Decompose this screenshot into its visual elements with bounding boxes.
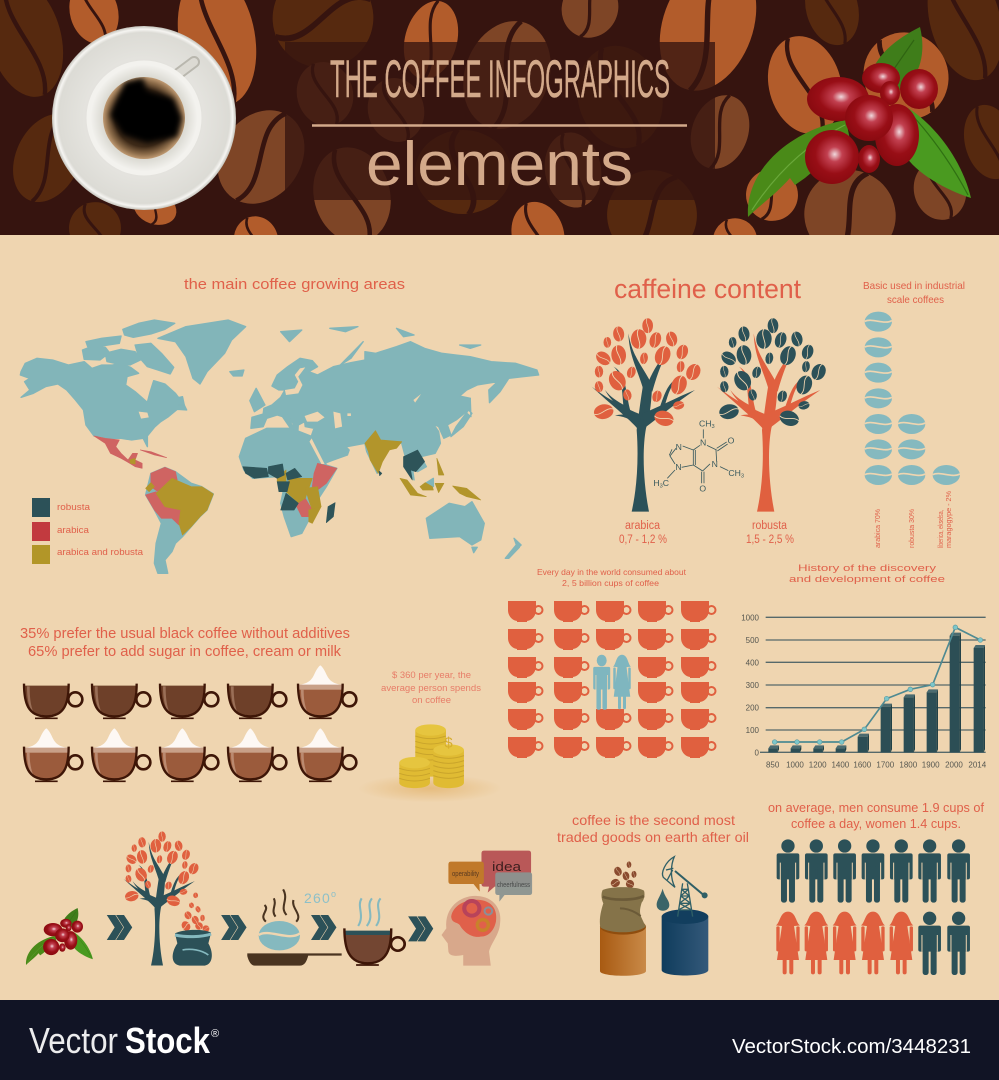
bars [768, 633, 985, 752]
bean chart labels [875, 491, 953, 548]
subtitle text: elements [366, 130, 633, 199]
y axis labels: 500 [746, 636, 760, 645]
industrial coffees heading [863, 280, 965, 306]
footer bar [0, 1000, 999, 1080]
process step: tree [123, 831, 200, 965]
caffeine molecule: O [728, 435, 735, 445]
preference text: 65% prefer to add sugar in coffee, cream or milk [28, 644, 342, 660]
caffeine molecule: O [699, 484, 706, 494]
spending text: on coffee [412, 695, 451, 705]
x axis labels: 1000 [786, 761, 804, 770]
y axis labels: 400 [746, 658, 760, 667]
bubble text: idea: idea [492, 859, 522, 874]
world consumption text: Every day in the world consumed about [537, 567, 687, 577]
y axis labels: 200 [746, 704, 760, 713]
x axis labels: 1800 [899, 761, 918, 770]
caffeine trees and molecule [592, 318, 829, 512]
x axis labels: 1900 [922, 761, 940, 770]
caffeine molecule [653, 418, 744, 494]
arabica label: 0,7 - 1,2 % [619, 534, 667, 546]
industrial coffees heading: scale coffees [887, 294, 944, 306]
header coffee bean pattern [0, 0, 999, 278]
process arrow 2 [221, 915, 247, 940]
men and women pictogram [776, 839, 970, 975]
history chart title: and development of coffee [789, 574, 945, 584]
title panel [285, 42, 715, 200]
bean chart labels: maragogype - 2% [946, 491, 953, 548]
caffeine molecule: N [700, 438, 706, 448]
robusta label [746, 520, 794, 546]
traded goods text [557, 812, 749, 845]
caffeine molecule: CH [699, 418, 712, 428]
oil derrick pump [663, 857, 708, 917]
legend: arabica and robusta: arabica and robusta [57, 547, 144, 558]
caffeine molecule: CH [728, 468, 741, 478]
caffeine molecule: N [675, 462, 682, 472]
spending text: $ 360 per year, the [392, 670, 471, 680]
industrial coffees bean chart [865, 312, 960, 485]
speech bubble: cheerfulness [495, 872, 532, 902]
consumption by gender text: on average, men consume 1.9 cups of [768, 800, 984, 815]
robusta label: 1,5 - 2,5 % [746, 534, 794, 546]
oil drop [657, 889, 669, 911]
history bar and line chart [741, 613, 987, 770]
coffee process flow [107, 831, 532, 966]
bean chart labels: arabica 70% [875, 509, 882, 548]
y axis labels: 100 [746, 726, 760, 735]
preference text [20, 626, 350, 660]
speech bubble: idea [481, 851, 531, 893]
coffee berries icon [748, 27, 971, 217]
consumption by gender text: coffee a day, women 1.4 cups. [791, 816, 961, 831]
oil barrel [662, 909, 708, 975]
spending text [381, 670, 482, 705]
x axis labels: 850 [766, 761, 780, 770]
caffeine molecule: C [663, 478, 669, 488]
process step: roasting pan [247, 889, 342, 966]
header banner [0, 0, 999, 235]
speech bubble: operability [448, 862, 484, 892]
world consumption text: 2, 5 billion cups of coffee [562, 578, 659, 588]
caffeine molecule: 3 [660, 484, 663, 490]
legend: robusta: robusta [57, 502, 91, 513]
x axis labels: 1600 [853, 761, 872, 770]
process step: head with ideas [442, 851, 532, 966]
traded goods text: traded goods on earth after oil [557, 829, 749, 845]
bubble text: cheerfulness: cheerfulness [497, 880, 530, 889]
process step: sack of beans [173, 893, 212, 966]
trend line [772, 625, 983, 744]
caffeine heading: caffeine content [614, 274, 801, 304]
x axis labels: 1700 [876, 761, 895, 770]
map heading: the main coffee growing areas [184, 276, 405, 293]
gold coins icon: $ [445, 735, 453, 751]
footer logo: Vector [29, 1020, 118, 1061]
y axis grid [760, 617, 986, 752]
spending text: average person spends [381, 683, 482, 693]
robusta label: robusta [752, 520, 788, 532]
y axis labels: 300 [746, 681, 760, 690]
caffeine molecule: N [712, 459, 718, 469]
process step: coffee cup [344, 898, 405, 965]
map legend [32, 498, 144, 564]
coffee cup icon [52, 26, 236, 210]
roasting temperature: 260 [304, 890, 330, 906]
cups grid [508, 601, 716, 758]
bean chart labels: liberica, ekselsa, [938, 510, 945, 548]
roasting temperature: o [331, 889, 336, 899]
footer logo: Stock [125, 1020, 211, 1061]
caffeine molecule: 3 [741, 474, 744, 480]
coffee and oil barrels [600, 857, 708, 976]
black and cream coffee cups [24, 665, 356, 781]
y axis labels: 1000 [741, 613, 760, 622]
arabica tree [592, 318, 703, 512]
women row [776, 912, 913, 974]
coffee barrel [600, 861, 646, 976]
world map [20, 320, 539, 573]
process arrow 1 [107, 915, 132, 940]
y axis labels: 0 [755, 748, 760, 757]
traded goods text: coffee is the second most [572, 812, 735, 828]
x axis labels: 1400 [831, 761, 850, 770]
legend: arabica: arabica [57, 525, 90, 536]
gold coins icon [358, 724, 502, 802]
footer logo: ® [211, 1028, 219, 1040]
couple icons [593, 655, 631, 710]
preference text: 35% prefer the usual black coffee without additives [20, 626, 350, 642]
robusta tree [717, 318, 829, 512]
bean chart labels: robusta 30% [909, 509, 916, 548]
footer logo [29, 1020, 219, 1061]
x axis labels: 1200 [809, 761, 827, 770]
caffeine molecule: N [676, 442, 682, 452]
process arrow 4 [408, 916, 433, 941]
world consumption text [537, 567, 687, 588]
x axis labels: 2000 [945, 761, 963, 770]
x axis labels [766, 761, 987, 770]
process arrow 3 [311, 915, 336, 940]
history chart title [789, 563, 945, 584]
process step: berries [26, 908, 93, 965]
caffeine molecule: H [653, 478, 660, 488]
y axis labels [741, 613, 760, 757]
arabica label: arabica [625, 520, 661, 532]
arabica label [619, 520, 667, 546]
men row [777, 839, 970, 903]
x axis labels: 2014 [968, 761, 987, 770]
men in second row [918, 912, 970, 975]
bubble text: operability: operability [452, 869, 479, 878]
history chart title: History of the discovery [798, 563, 937, 573]
industrial coffees heading: Basic used in industrial [863, 280, 965, 292]
footer image id: VectorStock.com/3448231 [732, 1036, 971, 1058]
consumption by gender text [768, 800, 984, 831]
caffeine molecule: 3 [712, 424, 715, 430]
